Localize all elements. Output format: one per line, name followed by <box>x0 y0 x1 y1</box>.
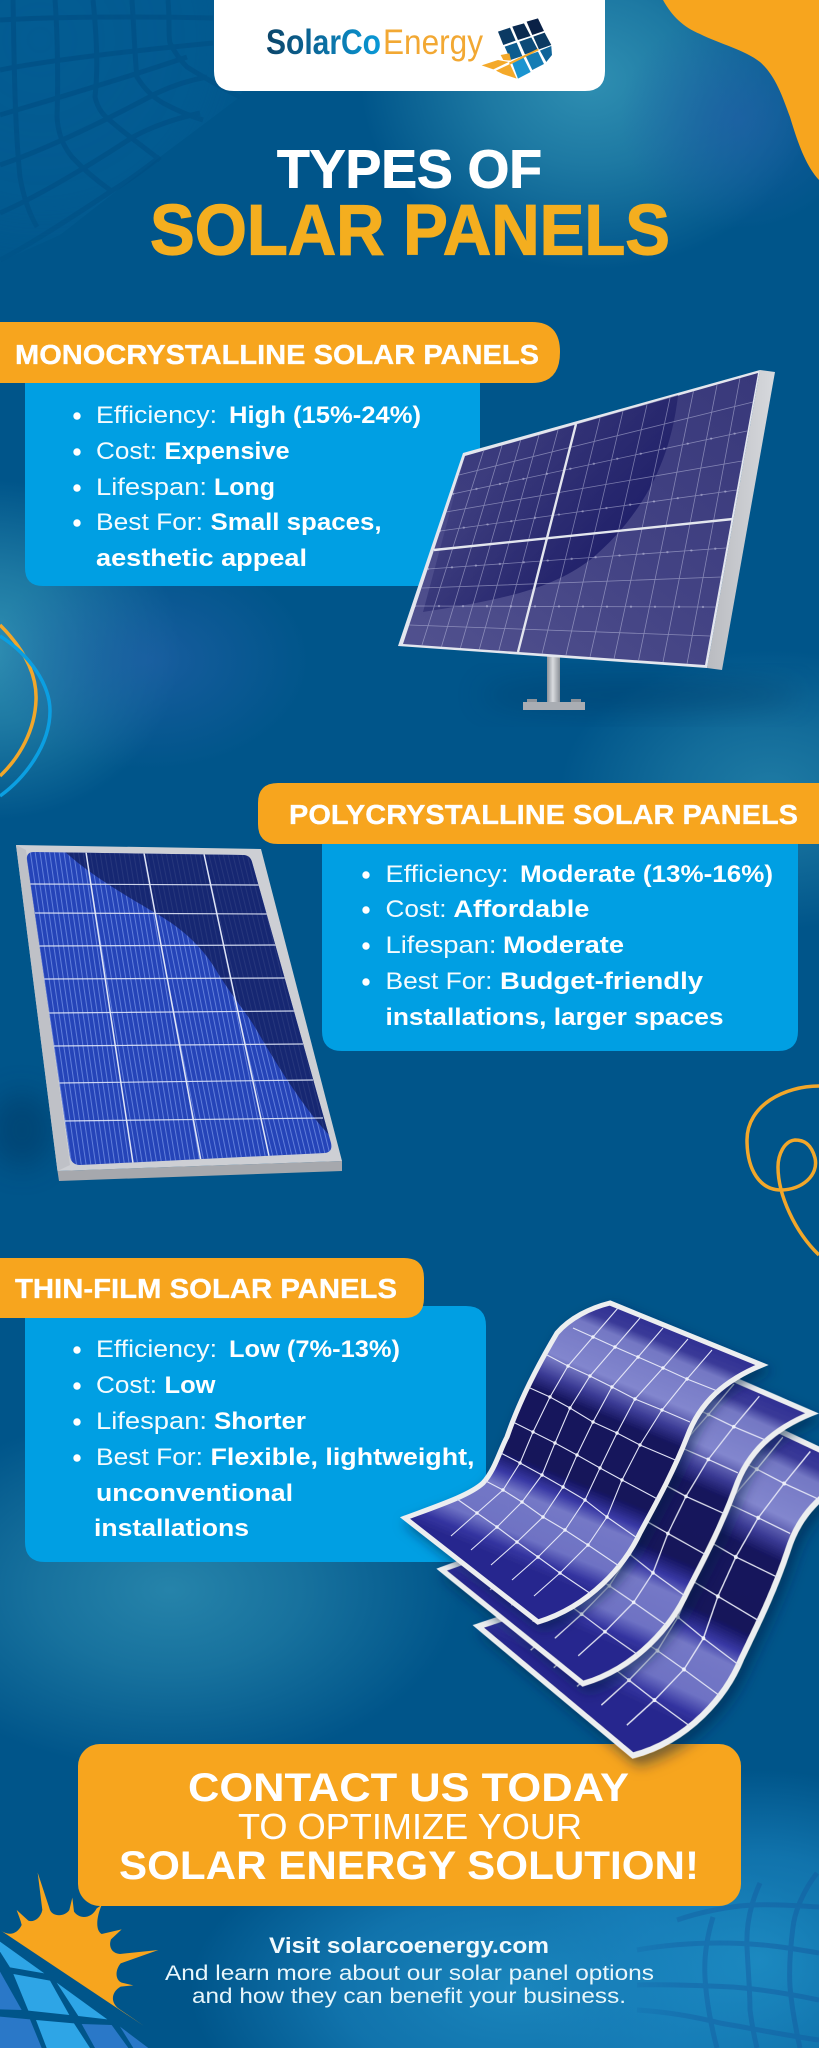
title: SOLAR PANELS <box>150 192 670 270</box>
call to action: TO OPTIMIZE YOUR <box>238 1806 582 1847</box>
logo card <box>214 0 605 91</box>
monocrystalline bullet list: Long <box>214 474 275 501</box>
polycrystalline bullet list: Lifespan: <box>386 932 496 959</box>
thin-film bullet list: Low (7%-13%) <box>229 1336 400 1363</box>
monocrystalline bullet list: Efficiency: <box>96 402 217 429</box>
heading: polycrystalline: POLYCRYSTALLINE SOLAR PANELS <box>289 799 798 830</box>
polycrystalline bullet list: installations, larger spaces <box>386 1004 724 1031</box>
heading: thin-film: THIN-FILM SOLAR PANELS <box>15 1273 397 1304</box>
monocrystalline bullet list: Expensive <box>164 438 290 465</box>
panel: monocrystalline details <box>25 383 480 586</box>
thin-film bullet list: Efficiency: <box>96 1336 217 1363</box>
title <box>150 140 670 270</box>
illustration: monocrystalline panel on stand <box>398 370 800 711</box>
footer text: and how they can benefit your business. <box>192 1985 626 2008</box>
illustration: polycrystalline panel <box>0 845 342 1181</box>
polycrystalline bullet list: Moderate (13%-16%) <box>520 861 773 888</box>
heading: thin-film <box>0 1258 424 1318</box>
polycrystalline bullet list: Moderate <box>503 932 624 959</box>
monocrystalline bullet list: Best For: <box>96 509 203 536</box>
call to action: CONTACT US TODAY <box>188 1766 629 1810</box>
heading: monocrystalline <box>0 322 560 383</box>
polycrystalline bullet list: Affordable <box>453 896 589 923</box>
logo wordmark <box>266 23 483 62</box>
decorative orange blob, top right <box>663 0 819 180</box>
polycrystalline bullet list: Efficiency: <box>386 861 508 888</box>
title: TYPES OF <box>277 140 542 200</box>
thin-film bullet list: Cost: <box>96 1372 157 1399</box>
icon: sun rising behind solar panel <box>0 1873 158 2048</box>
decorative arcs, left <box>0 625 50 796</box>
thin-film bullet list: Flexible, lightweight, <box>210 1444 474 1471</box>
thin-film bullet list: unconventional <box>96 1480 293 1507</box>
polycrystalline bullet list <box>362 861 773 1031</box>
monocrystalline bullet list: Small spaces, <box>210 509 382 536</box>
thin-film bullet list: Shorter <box>214 1408 306 1435</box>
thin-film bullet list: Lifespan: <box>96 1408 207 1435</box>
background solar grid, bottom right <box>637 1873 819 2048</box>
illustration: flexible thin-film panels <box>405 1303 819 1770</box>
footer text: And learn more about our solar panel options <box>165 1962 654 1985</box>
polycrystalline bullet list: Budget-friendly <box>500 968 704 995</box>
footer text: Visit solarcoenergy.com <box>269 1933 549 1958</box>
panel: polycrystalline details <box>322 844 798 1051</box>
monocrystalline bullet list: Lifespan: <box>96 474 207 501</box>
call to action <box>78 1744 741 1906</box>
monocrystalline bullet list: aesthetic appeal <box>96 545 307 572</box>
monocrystalline bullet list: Cost: <box>96 438 157 465</box>
footer text <box>165 1933 654 2008</box>
logo wordmark: SolarCo <box>266 23 381 62</box>
logo wordmark: Energy <box>383 23 483 62</box>
polycrystalline bullet list: Best For: <box>386 968 492 995</box>
polycrystalline bullet list: Cost: <box>386 896 446 923</box>
heading: polycrystalline <box>258 783 819 844</box>
thin-film bullet list: Low <box>164 1372 216 1399</box>
call to action: SOLAR ENERGY SOLUTION! <box>119 1844 699 1888</box>
monocrystalline bullet list <box>73 402 421 572</box>
heading: monocrystalline: MONOCRYSTALLINE SOLAR PANELS <box>15 339 539 370</box>
logo icon: solar panel <box>482 18 552 79</box>
panel: thin-film details <box>25 1306 486 1562</box>
monocrystalline bullet list: High (15%-24%) <box>229 402 421 429</box>
decorative curl, right <box>747 1086 819 1255</box>
thin-film bullet list: installations <box>94 1515 249 1542</box>
thin-film bullet list <box>73 1336 475 1542</box>
thin-film bullet list: Best For: <box>96 1444 203 1471</box>
background solar grid, top left <box>5 5 75 75</box>
